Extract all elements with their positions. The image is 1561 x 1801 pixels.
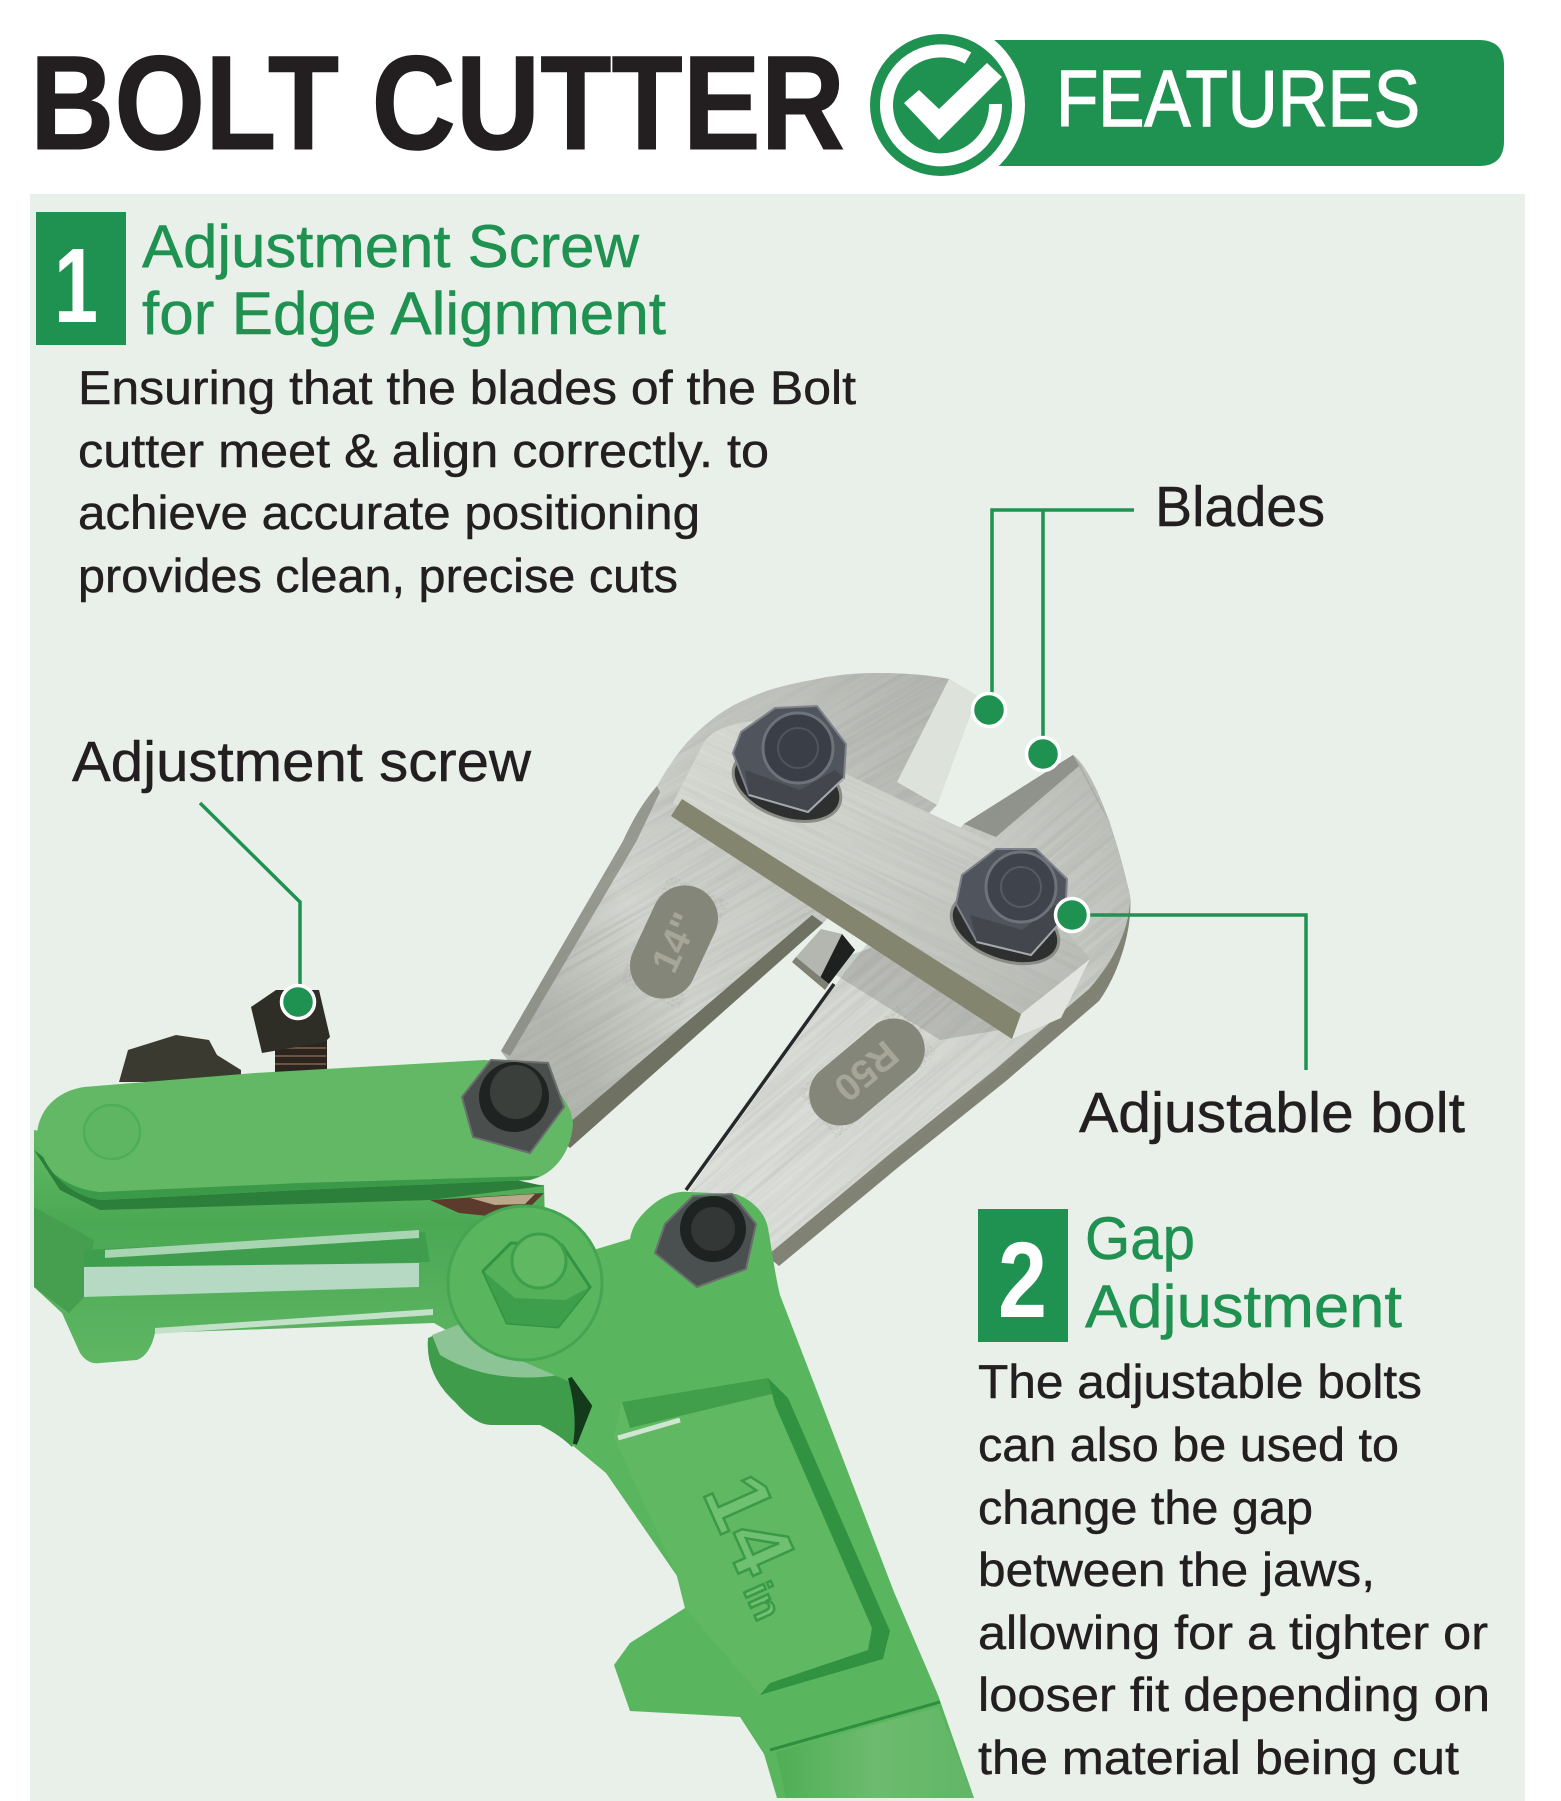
centre pin [792,929,855,990]
section 2 body text: looser fit depending on [978,1668,1490,1721]
number box 2: 2 [998,1219,1047,1340]
notch shadow [570,1378,590,1444]
bolt label: Adjustable bolt [1079,1081,1465,1145]
brown washer [430,1193,544,1217]
section 2 heading: Gap [1085,1205,1195,1272]
main handle [470,1192,974,1798]
upper jaw [501,673,977,1148]
upper jaw oval stamp: 14" [644,907,708,979]
cover plate [671,721,1090,1039]
dark shadow at arm end [34,1207,94,1313]
blades label: Blades [1155,475,1325,539]
icon: check mark [870,34,1012,176]
lower jaw oval stamp [797,1006,937,1138]
green link plate [34,1060,573,1210]
top adjustable bolt [723,706,851,835]
section 1 body text [78,361,856,602]
embossed size mark: in [735,1576,790,1627]
badge white circle cut [857,21,1025,189]
section 1 heading: Adjustment Screw [142,213,640,280]
section 1 heading [142,213,666,347]
section 2 heading: Adjustment [1085,1273,1402,1340]
page title: BOLT CUTTER [30,29,845,178]
upper jaw oval stamp [619,875,729,1009]
handle bolt [655,1194,756,1287]
blades dot lower [1026,738,1060,770]
screw label: Adjustment screw [72,730,532,794]
section 2 body text: between the jaws, [978,1543,1375,1596]
section 2: gap adjustment [978,1205,1490,1784]
screw leader line [200,803,300,990]
number box 2 [978,1209,1068,1342]
blades dot upper [972,694,1006,726]
features badge [857,21,1504,189]
section 1 body text: cutter meet & align correctly. to [78,424,769,477]
embossed size mark: 14 [685,1459,815,1589]
blades leader lines [992,510,1134,745]
section 2 body text: the material being cut [978,1731,1459,1784]
handle recess [614,1378,890,1695]
hub nut [448,1206,602,1360]
bolt dot [1056,898,1088,932]
lower arm [34,1130,545,1363]
section 1 body text: Ensuring that the blades of the Bolt [78,361,856,414]
screw dot [282,986,314,1018]
handle tube [776,1707,974,1798]
adjustment screw [251,990,330,1072]
raised rivet [84,1105,140,1159]
section 1 body text: provides clean, precise cuts [78,549,678,602]
section 2 body text: The adjustable bolts [978,1355,1422,1408]
section 1 heading: for Edge Alignment [142,280,666,347]
bolt cutter illustration [34,673,1130,1798]
section 2 body text: change the gap [978,1481,1313,1534]
lower jaw [684,755,1130,1266]
link bolt [462,1060,564,1153]
section 1: adjustment screw [36,212,856,602]
callout: adjustment screw [72,730,532,1018]
section 2 body text [978,1355,1490,1784]
hub flange [428,1320,600,1447]
section 2 body text: allowing for a tighter or [978,1606,1488,1659]
rear nut [119,1035,241,1082]
section 2 body text: can also be used to [978,1418,1399,1471]
badge pill [985,40,1504,166]
callout: adjustable bolt [1056,898,1465,1145]
bolt leader line [1085,915,1306,1070]
lower jaw oval stamp: R50 [826,1032,906,1109]
arm highlight bands [84,1230,433,1334]
number box 1: 1 [54,227,98,345]
section 1 body text: achieve accurate positioning [78,486,700,539]
number box 1 [36,212,126,345]
section 2 heading [1085,1205,1402,1340]
callout: blades [972,475,1325,770]
badge text: FEATURES [1056,54,1420,143]
right adjustable bolt [941,849,1069,977]
